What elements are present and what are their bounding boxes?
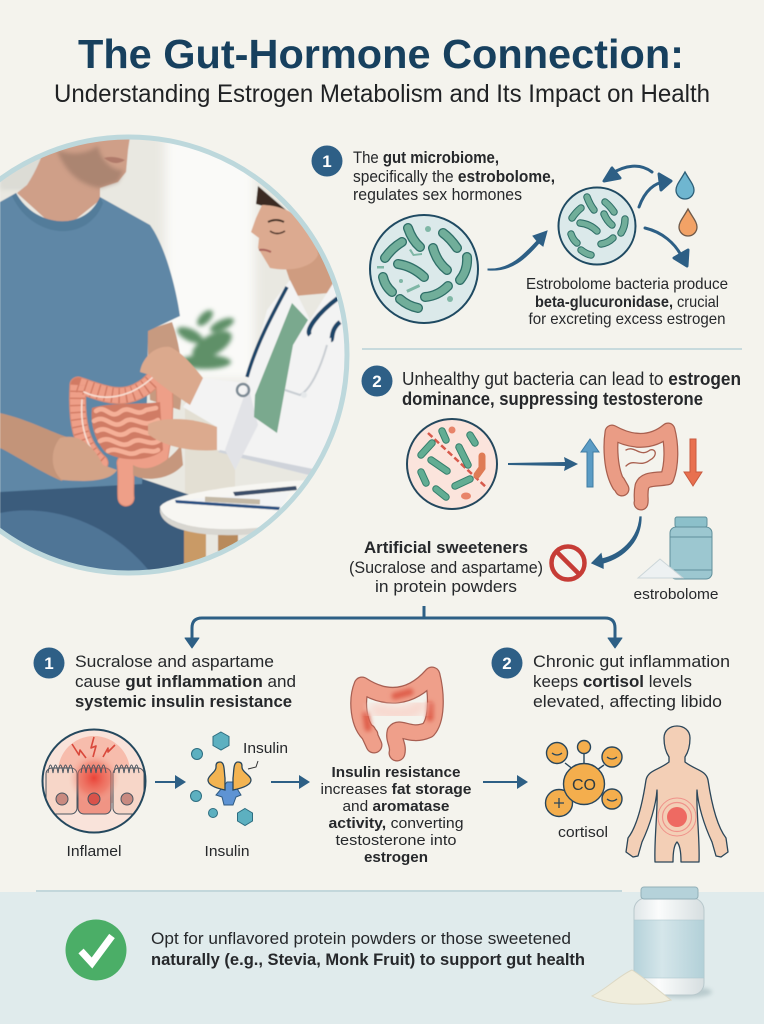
recommendation text: naturally (e.g., Stevia, Monk Fruit) to support gut health (151, 950, 585, 969)
doctor hair (256, 186, 322, 260)
left branch text: systemic insulin resistance (75, 692, 292, 711)
icon: up arrow (581, 439, 599, 487)
intestine colon (78, 368, 165, 498)
right branch text (533, 652, 730, 711)
left branch text: Sucralose and aspartame (75, 652, 274, 671)
arrows: estrobolome cycle (604, 166, 688, 266)
insulin resistance text: activity, converting (328, 815, 464, 832)
man arm right (147, 322, 182, 410)
arrow: bacteria to gut (508, 457, 578, 471)
step 1 text: The gut microbiome, (353, 149, 499, 167)
icon: insulin receptor (190, 732, 258, 826)
step 1 text (353, 149, 555, 204)
jeans (0, 478, 189, 570)
artificial sweeteners text: (Sucralose and aspartame) (349, 559, 543, 577)
patient neck and face (16, 140, 130, 222)
icon: colon (611, 430, 671, 503)
stethoscope (237, 287, 340, 398)
right branch text: elevated, affecting libido (533, 692, 722, 711)
insulin resistance text: testosterone into (336, 832, 456, 849)
step 2 text (402, 369, 741, 409)
left branch badge: 1 (44, 654, 54, 673)
icon: prohibition sign (552, 546, 584, 580)
icon: cortisol molecule: CO (572, 777, 596, 794)
icon: bacteria circle large (370, 215, 478, 323)
beta-glucuronidase text: Estrobolome bacteria produce (526, 276, 728, 293)
step 2 text: dominance, suppressing testosterone (402, 389, 703, 409)
icon: human body with inflammation (626, 726, 728, 862)
lab coat (184, 280, 344, 469)
arrow: to second bacteria circle (488, 231, 547, 270)
pen (233, 486, 297, 496)
title: The Gut-Hormone Connection: (78, 31, 684, 77)
arrow: gut to sweeteners (592, 517, 641, 568)
insulin resistance text: and aromatase (342, 798, 450, 815)
scrubs (254, 303, 308, 433)
label: cortisol: cortisol (558, 824, 608, 841)
panel: recommendation band (0, 887, 764, 1024)
clipboard (175, 492, 290, 510)
left forearm (0, 413, 70, 481)
step 2 badge (362, 366, 392, 396)
small intestine (92, 402, 163, 459)
beta-glucuronidase text: for excreting excess estrogen (528, 311, 726, 328)
icon: down arrow (684, 439, 702, 486)
right branch text: keeps cortisol levels (533, 672, 692, 691)
icon: cortisol molecule (546, 740, 622, 816)
step 1 text: specifically the estrobolome, (353, 168, 555, 186)
icon: inflamed gut lining (42, 730, 146, 832)
label: inflamel: Inflamel (66, 843, 122, 860)
insulin resistance text: Insulin resistance (332, 764, 460, 781)
label: insulin: Insulin (204, 843, 250, 860)
icon: green check (66, 920, 126, 980)
artificial sweeteners text: in protein powders (375, 578, 517, 596)
right branch badge (492, 648, 522, 678)
insulin resistance text: increases fat storage (320, 781, 472, 798)
step 1 badge (312, 146, 342, 176)
subtitle: Understanding Estrogen Metabolism and Its Impact on Health (54, 80, 710, 108)
hands (53, 437, 117, 481)
insulin resistance text (320, 764, 472, 866)
right branch badge: 2 (502, 654, 512, 673)
arrow: insulin to resistance (271, 775, 310, 789)
icon: protein jar and powder (592, 887, 712, 1004)
insulin resistance text: estrogen (364, 849, 428, 866)
icon: protein jar with powder (638, 517, 712, 579)
right branch text: Chronic gut inflammation (533, 652, 730, 671)
label: insulin callout: Insulin (243, 740, 288, 757)
left branch text: cause gut inflammation and (75, 672, 296, 691)
left branch text (75, 652, 296, 711)
recommendation text (151, 929, 585, 969)
arrow: inflammation to insulin (155, 775, 186, 789)
left branch badge (34, 648, 64, 678)
arrow: resistance to cortisol (483, 775, 528, 789)
photo: doctor showing gut model to patient (0, 130, 360, 580)
beta-glucuronidase text: beta-glucuronidase, crucial (535, 294, 719, 311)
doctor face (251, 205, 318, 269)
step 1 badge: 1 (322, 152, 332, 171)
table legs (183, 530, 206, 564)
icon: blue drop (676, 172, 694, 199)
table (159, 480, 304, 529)
artificial sweeteners text (349, 539, 543, 596)
step 1 text: regulates sex hormones (353, 186, 522, 204)
t-shirt (0, 193, 180, 492)
icon: bacteria circle small (558, 188, 636, 264)
step 2 badge: 2 (372, 372, 382, 391)
doctor neck (286, 250, 332, 296)
icon: orange drop (679, 209, 697, 236)
step 2 text: Unhealthy gut bacteria can lead to estrogen (402, 369, 741, 389)
beta-glucuronidase text (526, 276, 728, 328)
recommendation text: Opt for unflavored protein powders or those sweetened (151, 929, 571, 948)
arrow: branching connector (185, 606, 622, 648)
icon: unhealthy bacteria circle (407, 419, 497, 509)
artificial sweeteners text: Artificial sweeteners (364, 539, 528, 557)
icon: inflamed colon (359, 675, 435, 753)
label: estrobolome: estrobolome (634, 586, 718, 603)
